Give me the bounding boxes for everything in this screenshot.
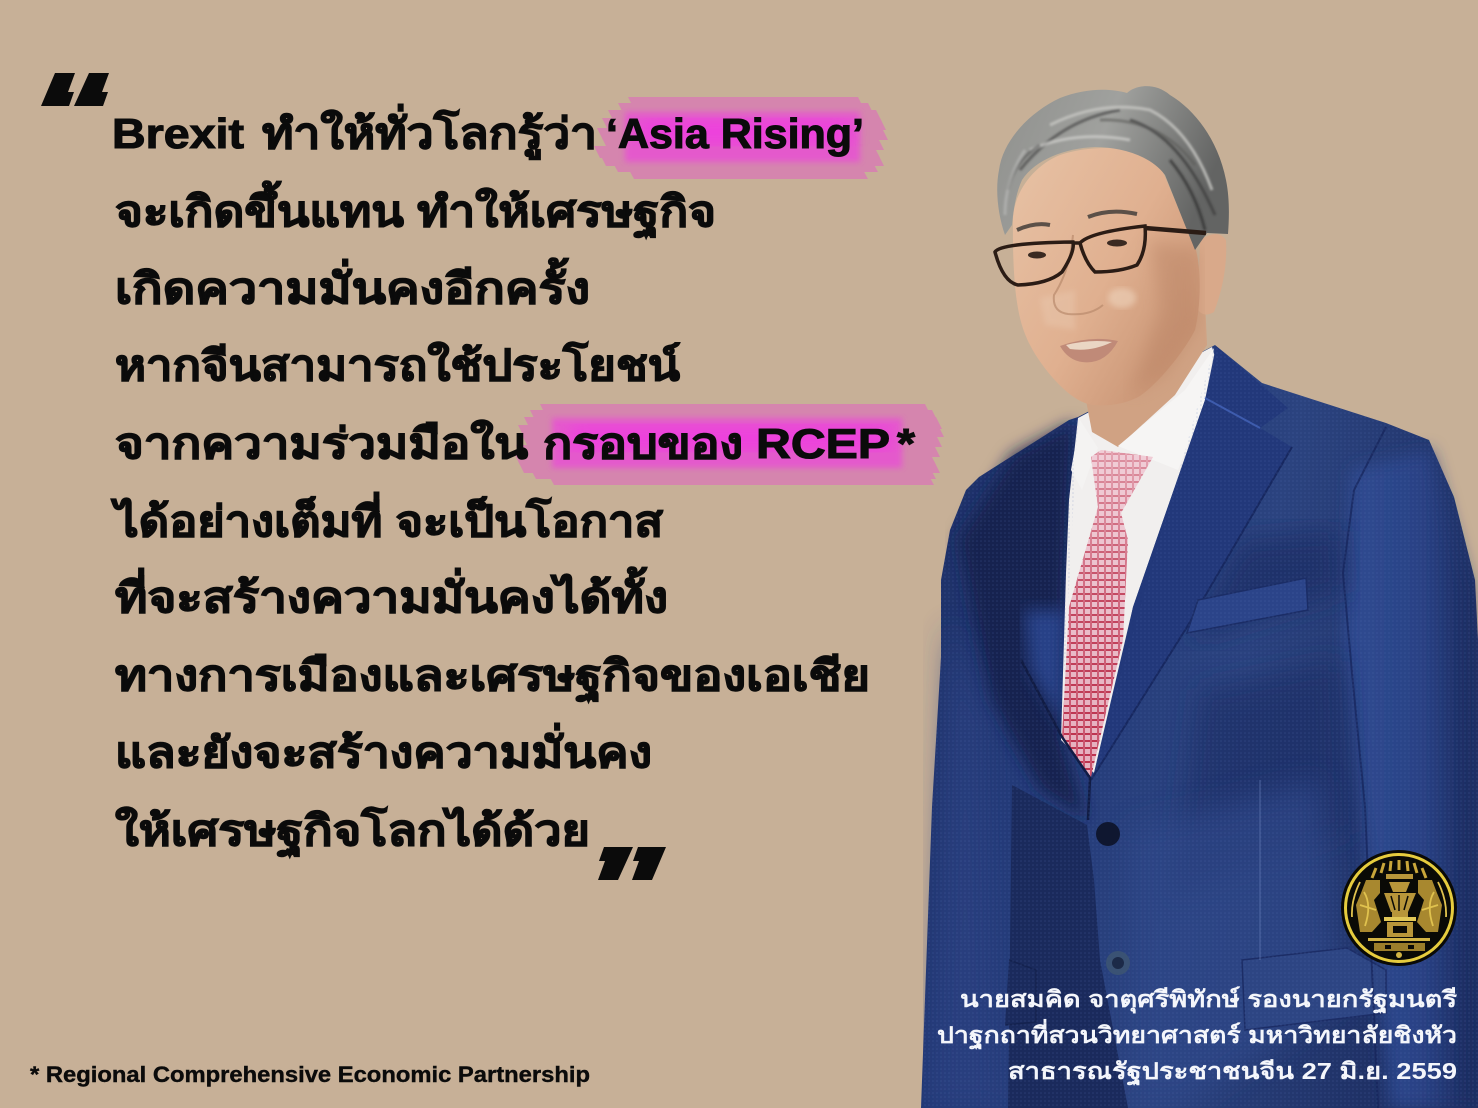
quote text: จากความร่วมมือใน [115,419,528,467]
quote text: Brexit [112,110,244,157]
highlight brush: RCEP [514,404,944,485]
collar [1118,348,1214,470]
face [1013,148,1200,405]
quote text: ทำให้ทั่วโลกรู้ว่า [262,104,597,160]
tie sheen [1062,450,1153,777]
quote text: ทางการเมืองและเศรษฐกิจของเอเชีย [115,652,870,703]
quote text: จะเกิดขึ้นแทน ทำให้เศรษฐกิจ [115,180,716,239]
right lapel [1091,346,1292,780]
hair [997,86,1229,250]
quote text: ได้อย่างเต็มที่ จะเป็นโอกาส [111,492,663,545]
emblem: base [1368,938,1430,958]
quote text: ที่จะสร้างความมั่นคงได้ทั้ง [115,566,668,621]
quote text: และยังจะสร้างความมั่นคง [115,723,652,776]
neck [1085,300,1207,447]
emblem: urn detail [1391,895,1408,911]
nose [1054,235,1103,314]
hair strands [1005,107,1215,230]
tie [1062,450,1153,777]
eyebrows [1017,212,1137,230]
emblem: guardian lions [1356,880,1442,932]
caption: นายสมคิด จาตุศรีพิทักษ์ รองนายกรัฐมนตรี [960,986,1458,1014]
quote text: ‘Asia Rising’ [606,110,864,157]
left lapel edge [1021,660,1090,820]
buttons [1096,822,1130,975]
caption [937,986,1458,1086]
eyes [1028,240,1127,258]
mouth [1060,339,1118,362]
lower left pocket [1005,960,1036,1025]
portrait photo illustration [921,86,1478,1108]
quote text: หากจีนสามารถใช้ประโยชน์ [115,341,681,389]
closing quotation mark [598,847,666,880]
face shading [1130,240,1198,395]
quote text: * [897,420,916,467]
quote text: กรอบของ [543,420,743,467]
ear [1198,234,1226,315]
emblem: sun rays [1372,860,1426,878]
breast pocket [1187,578,1308,633]
dark front panel [1008,785,1128,1108]
sleeve seam [1343,427,1386,1108]
caption: ปาฐกถาที่สวนวิทยาศาสตร์ มหาวิทยาลัยชิงหัว [937,1018,1457,1050]
quote text: RCEP [756,420,890,467]
emblem: central urn [1384,874,1416,937]
footnote: * Regional Comprehensive Economic Partnership [30,1062,590,1087]
suit shadows and highlights [930,422,1475,1108]
suit jacket [921,345,1478,1108]
quote text [111,104,916,858]
emblem: lion scrolls [1352,882,1446,926]
fabric texture [921,345,1478,1108]
shirt [1061,347,1216,773]
lower pocket flap [1242,948,1386,1030]
glasses [995,226,1206,285]
opening quotation mark [41,73,109,106]
quote text: ให้เศรษฐกิจโลกได้ด้วย [115,806,590,858]
highlight brush: Asia Rising [594,97,888,179]
emblem seal [1341,850,1457,966]
caption: สาธารณรัฐประชาชนจีน 27 มิ.ย. 2559 [1008,1058,1457,1086]
quote text: เกิดความมั่นคงอีกครั้ง [115,257,590,312]
